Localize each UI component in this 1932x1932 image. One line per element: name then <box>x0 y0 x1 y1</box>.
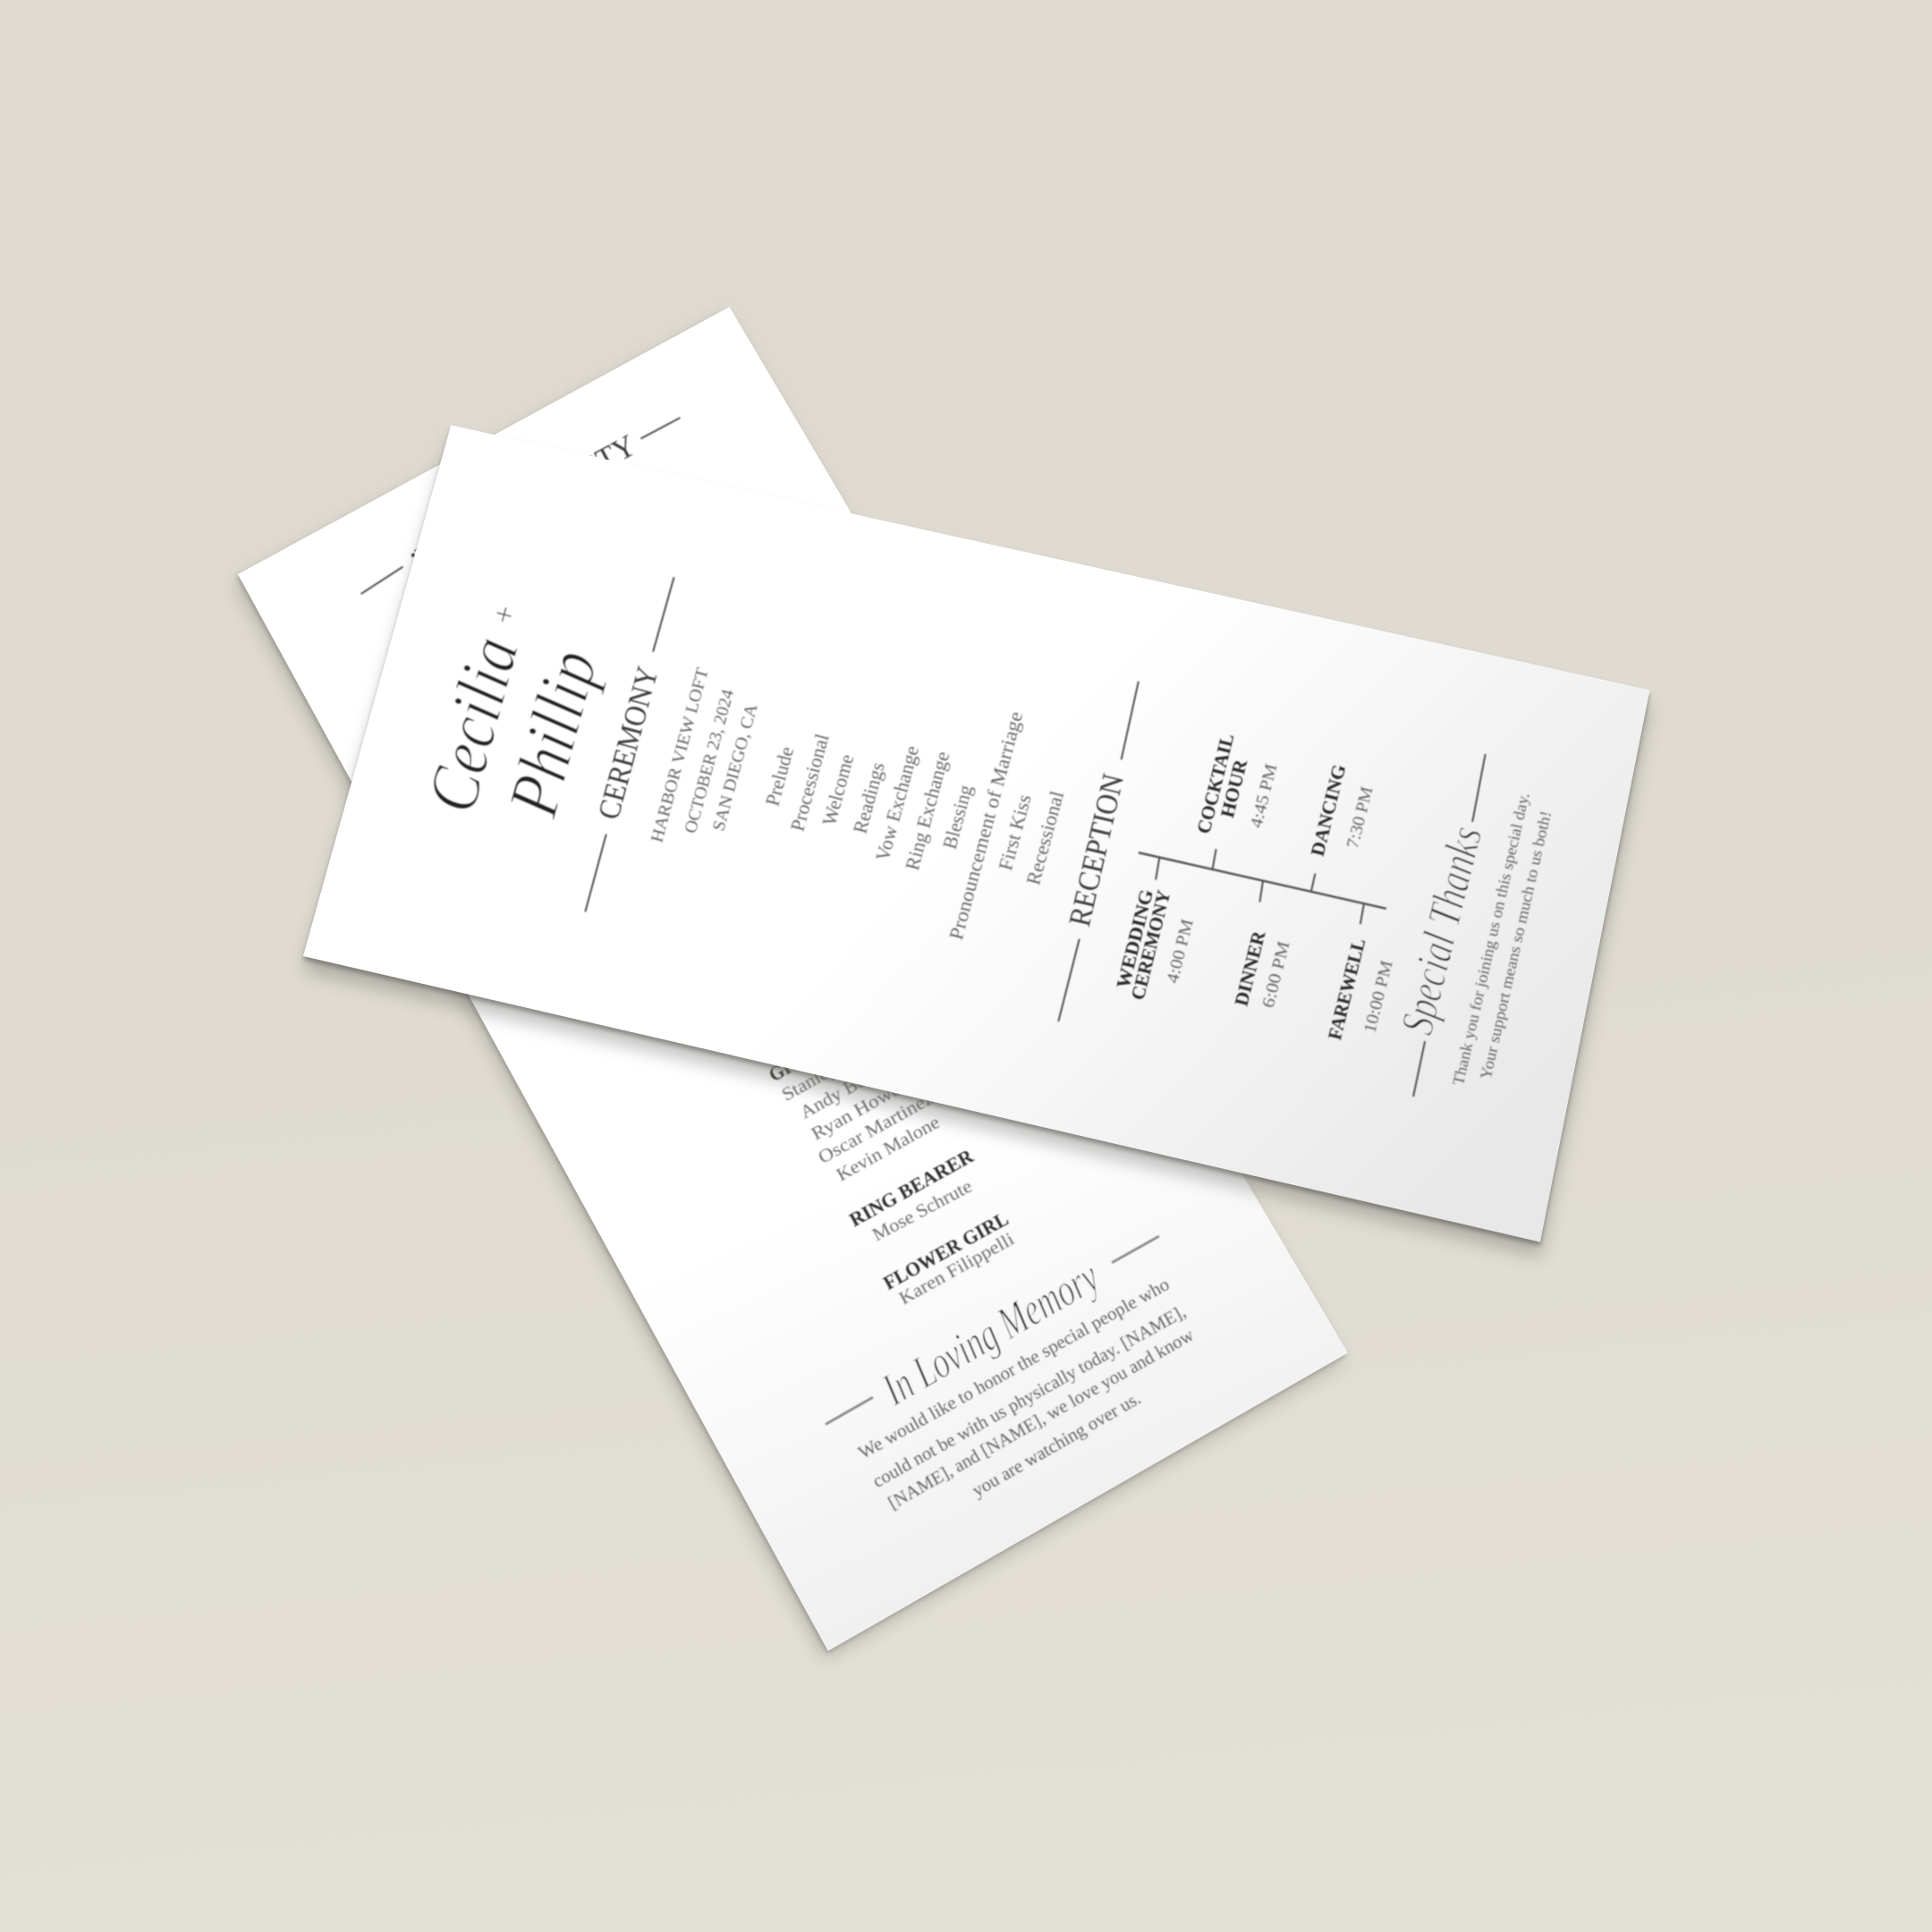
groomsman name: Oscar Martinez <box>815 1089 936 1168</box>
venue details: SAN DIEGO, CA <box>709 702 761 833</box>
groomsman name: Kevin Malone <box>834 1113 943 1185</box>
heading rule left <box>361 567 402 594</box>
reception rule top <box>1122 682 1139 759</box>
ceremony order list: Pronouncement of Marriage <box>945 708 1027 942</box>
event: farewell: 10:00 PM <box>1360 959 1397 1035</box>
event: farewell: FAREWELL <box>1324 936 1369 1042</box>
front card shadow <box>303 428 1650 1257</box>
event: dinner <box>1231 928 1293 1010</box>
flower girl heading: FLOWER GIRL <box>879 1208 1012 1294</box>
memorial paragraph: We would like to honor the special people who <box>855 1275 1173 1463</box>
panel: back card <box>234 307 1348 1660</box>
event: dancing: 7:30 PM <box>1343 784 1377 851</box>
thanks rule top <box>1472 754 1486 822</box>
name: Cecilia: Cecilia <box>412 629 534 820</box>
ceremony order list: First Kiss <box>994 792 1036 873</box>
couple names <box>412 600 613 825</box>
thanks rule bottom <box>1413 1041 1425 1097</box>
back card sheet <box>238 307 1348 1651</box>
name: Phillip: Phillip <box>494 642 613 825</box>
reception rule bottom <box>1058 939 1080 1021</box>
groomsman name: Andy Bernard <box>797 1050 906 1123</box>
groomsman name: Stanley Hudson <box>779 1026 900 1106</box>
venue details <box>648 665 761 844</box>
event: dancing <box>1307 762 1377 859</box>
script heading: special thanks: Special Thanks <box>1391 821 1493 1039</box>
ceremony order list: Welcome <box>818 751 858 827</box>
heading: wedding party: WEDDING PARTY <box>411 428 641 574</box>
event: cocktail hour: COCKTAIL <box>1192 732 1238 835</box>
event: cocktail hour <box>1192 732 1281 835</box>
back card text <box>361 418 1198 1513</box>
event: cocktail hour: 4:45 PM <box>1247 762 1281 830</box>
ring bearer name: Mose Schrute <box>869 1176 976 1245</box>
ceremony order list: Readings <box>849 759 889 835</box>
event: dinner: 6:00 PM <box>1259 939 1293 1010</box>
event: wedding ceremony: CEREMONY <box>1127 888 1174 1002</box>
ceremony heading: CEREMONY <box>592 663 665 823</box>
thank you message: Thank you for joining us on this special day. <box>1449 791 1533 1087</box>
ceremony order list: Processional <box>786 732 834 834</box>
front card text <box>412 577 1555 1097</box>
thank you message: Your support means so much to us both! <box>1477 809 1555 1081</box>
ring bearer heading: RING BEARER <box>845 1144 978 1231</box>
flower girl name: Karen Filippelli <box>896 1229 1018 1309</box>
event: dancing: DANCING <box>1307 762 1350 859</box>
ceremony order list: Prelude <box>760 744 798 809</box>
memorial paragraph: could not be with us physically today. [NAME], <box>869 1302 1190 1492</box>
event: cocktail hour: HOUR <box>1216 757 1251 820</box>
groomsman name: Ryan Howard <box>809 1071 919 1144</box>
event: wedding ceremony: WEDDING <box>1112 887 1157 990</box>
reception heading: RECEPTION <box>1063 771 1131 929</box>
event: wedding ceremony <box>1112 887 1198 1002</box>
memory rule right <box>1112 1236 1159 1263</box>
event: dinner: DINNER <box>1231 928 1270 1008</box>
heading ornament dot <box>411 554 415 557</box>
ceremony order list: Ring Exchange <box>901 749 953 873</box>
heading rule right <box>640 418 680 438</box>
timeline ticks <box>1156 849 1364 924</box>
ceremony order list: Blessing <box>938 783 977 852</box>
event: farewell <box>1324 936 1397 1042</box>
ceremony order list <box>760 708 1068 942</box>
timeline axis <box>1139 852 1386 909</box>
memory rule left <box>826 1397 873 1424</box>
script heading: in loving memory: In Loving Memory <box>873 1250 1108 1416</box>
memorial paragraph: you are watching over us. <box>969 1388 1144 1501</box>
event: wedding ceremony: 4:00 PM <box>1164 918 1198 985</box>
memorial paragraph: [NAME], and [NAME], we love you and know <box>886 1326 1198 1513</box>
venue details: HARBOR VIEW LOFT <box>648 665 713 844</box>
timeline chart <box>1112 732 1397 1042</box>
back card shadow <box>234 309 1347 1660</box>
ceremony order list: Recessional <box>1021 789 1068 887</box>
panel: front card <box>303 425 1650 1242</box>
ceremony rule top <box>653 577 674 652</box>
venue details: OCTOBER 23, 2024 <box>682 687 738 835</box>
front card sheet <box>303 425 1650 1242</box>
ceremony order list: Vow Exchange <box>871 743 923 863</box>
plus sign: + <box>484 600 524 630</box>
ceremony rule bottom <box>585 835 606 911</box>
groomsmen heading: GROOMSMEN <box>765 1004 889 1086</box>
